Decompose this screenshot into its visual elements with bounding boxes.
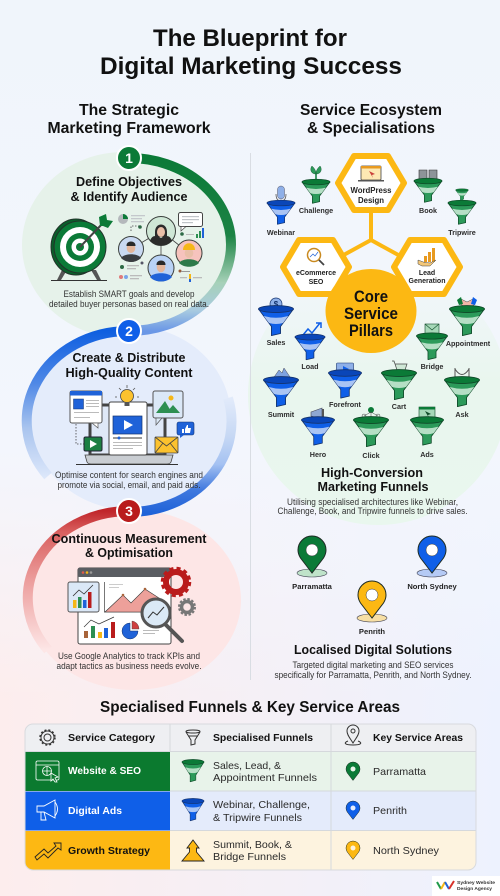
title: Digital Marketing Success	[100, 53, 402, 80]
funnel: Sales: $	[274, 300, 279, 309]
icon: green pin	[346, 762, 360, 780]
heading: service ecosystem: Service Ecosystem	[300, 102, 442, 119]
table row: Website and SEO	[36, 759, 426, 784]
badge 1	[117, 146, 141, 170]
funnel: Book	[414, 170, 442, 215]
funnel: Ask	[444, 368, 480, 419]
core circle: Pillars	[349, 321, 393, 340]
funnel: Cart	[382, 361, 416, 411]
hexagon: WordPress Design: Design	[358, 196, 384, 205]
icon: megaphone	[37, 800, 58, 820]
icon: growth arrow	[35, 843, 61, 860]
funnel: Load: Load	[301, 362, 319, 371]
heading: high-conversion marketing funnels: Marketing Funnels	[318, 479, 428, 494]
icon: gear	[40, 730, 55, 745]
heading: service ecosystem: & Specialisations	[307, 120, 435, 137]
step 1 heading	[70, 174, 188, 204]
pin: North Sydney	[407, 536, 457, 591]
table header row	[40, 725, 463, 745]
table row: Website and SEO: Parramatta	[373, 766, 426, 778]
core circle: Service	[344, 304, 398, 323]
funnel: Sales: Sales	[267, 338, 285, 347]
text: localised description: specifically for Parramatta, Penrith, and North Sydney.	[274, 670, 472, 680]
heading: localised digital solutions: Localised Digital Solutions	[294, 642, 452, 657]
core circle: Core	[354, 287, 388, 306]
hexagon: eCommerce SEO: eCommerce	[296, 270, 336, 277]
text: funnels description: Utilising specialised architectures like Webinar,	[287, 497, 458, 507]
funnel: Sales	[258, 298, 294, 347]
logo: agency: Design Agency	[457, 886, 493, 891]
pin: Penrith: Penrith	[359, 627, 385, 636]
step 2 heading: High-Quality Content	[66, 365, 193, 380]
hexagon: Lead Generation: Lead	[419, 270, 435, 277]
step 3 heading: Continuous Measurement	[52, 531, 207, 546]
hexagon: Lead Generation: Generation	[409, 278, 445, 285]
panel: step 1	[49, 146, 209, 309]
table header row: Specialised Funnels	[213, 732, 313, 744]
table row: Website and SEO: Appointment Funnels	[213, 772, 317, 784]
badge 2: 2	[125, 323, 133, 339]
funnel: Forefront: Forefront	[329, 400, 362, 409]
icon: converging arrows	[182, 840, 204, 861]
icon: laptop content illustration	[70, 385, 194, 464]
icon: funnel outline	[186, 730, 200, 745]
badge 3: 3	[125, 503, 133, 519]
heading: strategic marketing framework	[48, 102, 211, 137]
step 2 description: Optimise content for search engines and	[55, 470, 203, 480]
funnel: Ads	[410, 407, 444, 459]
title	[100, 25, 402, 80]
icon: target with arrow	[51, 214, 113, 280]
funnel: Bridge	[416, 324, 448, 371]
core circle	[326, 269, 416, 353]
badge 1: 1	[125, 150, 133, 166]
text: localised description: Targeted digital marketing and SEO services	[292, 660, 454, 670]
panel: step 3	[52, 499, 207, 671]
table row: Website and SEO: Sales, Lead, &	[213, 760, 281, 772]
table header row: Service Category	[68, 732, 155, 744]
icon: analytics dashboard	[68, 568, 195, 644]
step 1 description	[49, 289, 209, 309]
icon: green funnel	[182, 759, 204, 782]
funnel: Book: Book	[419, 206, 437, 215]
title: The Blueprint for	[153, 25, 347, 52]
pin: Parramatta: Parramatta	[292, 582, 333, 591]
table row: Digital Ads: Penrith	[373, 805, 407, 817]
funnel: Summit: Summit	[268, 410, 295, 419]
panel: funnels	[258, 166, 491, 460]
step 1 description: detailed buyer personas based on real data.	[49, 299, 209, 309]
table row: Website and SEO: Website & SEO	[68, 765, 141, 777]
heading: high-conversion marketing funnels: High-Conversion	[321, 465, 423, 480]
icon: website	[36, 761, 59, 782]
table row: Growth Strategy: Bridge Funnels	[213, 851, 286, 863]
pin: Parramatta	[292, 536, 333, 591]
funnel: Ads: Ads	[420, 450, 434, 459]
funnel: Challenge	[299, 166, 333, 215]
hexagon: WordPress Design	[338, 156, 404, 210]
step 2 description	[55, 470, 203, 490]
step 2 description: promote via social, email, and paid ads.	[58, 480, 200, 490]
hexagon: eCommerce SEO	[283, 240, 349, 294]
heading: strategic marketing framework: Marketing Framework	[48, 120, 211, 137]
icon: blue pin	[346, 801, 360, 820]
icon: blue funnel	[182, 798, 204, 821]
table row: Growth Strategy: Summit, Book, &	[213, 839, 292, 851]
step 3 description: adapt tactics as business needs evolve.	[56, 661, 202, 671]
funnel: Appointment: Appointment	[446, 339, 491, 348]
funnel: Load	[295, 323, 325, 371]
funnel: Forefront	[328, 363, 362, 409]
table	[25, 724, 476, 870]
funnel: Click: Click	[362, 451, 380, 460]
table row: Growth Strategy: North Sydney	[373, 845, 440, 857]
funnel: Hero	[302, 408, 334, 459]
hexagon: Lead Generation	[394, 240, 460, 294]
step rings	[27, 158, 231, 650]
panel: localised pins	[292, 536, 457, 636]
funnel: Ask: Ask	[455, 410, 469, 419]
text: funnels description	[278, 497, 468, 516]
text: funnels description: Challenge, Book, and Tripwire funnels to drive sales.	[278, 506, 468, 516]
table header row: Key Service Areas	[373, 732, 463, 744]
table row: Digital Ads: & Tripwire Funnels	[213, 812, 302, 824]
funnel: Webinar: Webinar	[267, 228, 295, 237]
funnel: Tripwire: Tripwire	[448, 228, 476, 237]
step 1 description: Establish SMART goals and develop	[64, 289, 195, 299]
icon: location outline	[345, 725, 361, 745]
panel: step 2	[55, 319, 203, 490]
funnel: Cart: Cart	[392, 402, 407, 411]
heading: high-conversion marketing funnels	[318, 465, 428, 494]
step 3 description: Use Google Analytics to track KPIs and	[58, 651, 200, 661]
logo: agency: Sydney Website	[457, 880, 496, 885]
panel: step backgrounds	[22, 152, 241, 690]
funnel: Webinar	[267, 186, 295, 237]
hexagon: eCommerce SEO: SEO	[309, 279, 324, 286]
heading: specialised funnels and key service areas: Specialised Funnels & Key Service Areas	[100, 699, 400, 716]
step 1 heading: & Identify Audience	[70, 189, 188, 204]
icon: persona network	[118, 212, 204, 282]
panel: core service pillars	[283, 156, 460, 353]
step 3 description	[56, 651, 202, 671]
funnel: Challenge: Challenge	[299, 206, 333, 215]
step 3 heading: & Optimisation	[85, 545, 173, 560]
step 1 heading: Define Objectives	[76, 174, 182, 189]
heading: service ecosystem	[300, 102, 442, 137]
heading: strategic marketing framework: The Strategic	[79, 102, 179, 119]
table row: Digital Ads	[37, 798, 407, 824]
pin: North Sydney: North Sydney	[407, 582, 457, 591]
table row: Digital Ads: Webinar, Challenge,	[213, 799, 310, 811]
badge 3	[117, 499, 141, 523]
icon: yellow pin	[346, 841, 360, 860]
funnel: Tripwire	[448, 189, 476, 237]
funnel: Click	[354, 407, 388, 460]
funnel: Appointment	[446, 297, 491, 348]
table row: Growth Strategy: Growth Strategy	[68, 845, 150, 857]
table row: Digital Ads: Digital Ads	[68, 805, 122, 817]
pin: Penrith	[357, 581, 387, 636]
funnel: Bridge: Bridge	[421, 362, 443, 371]
funnel: Hero: Hero	[310, 450, 327, 459]
table row: Growth Strategy	[35, 839, 440, 863]
logo: agency	[432, 876, 500, 896]
text: localised description	[274, 660, 472, 680]
step 2 heading	[66, 350, 193, 380]
hexagon: WordPress Design: WordPress	[350, 186, 392, 195]
badge 2	[117, 319, 141, 343]
step 2 heading: Create & Distribute	[72, 350, 186, 365]
funnel: Summit	[264, 368, 298, 419]
step 3 heading	[52, 531, 207, 560]
